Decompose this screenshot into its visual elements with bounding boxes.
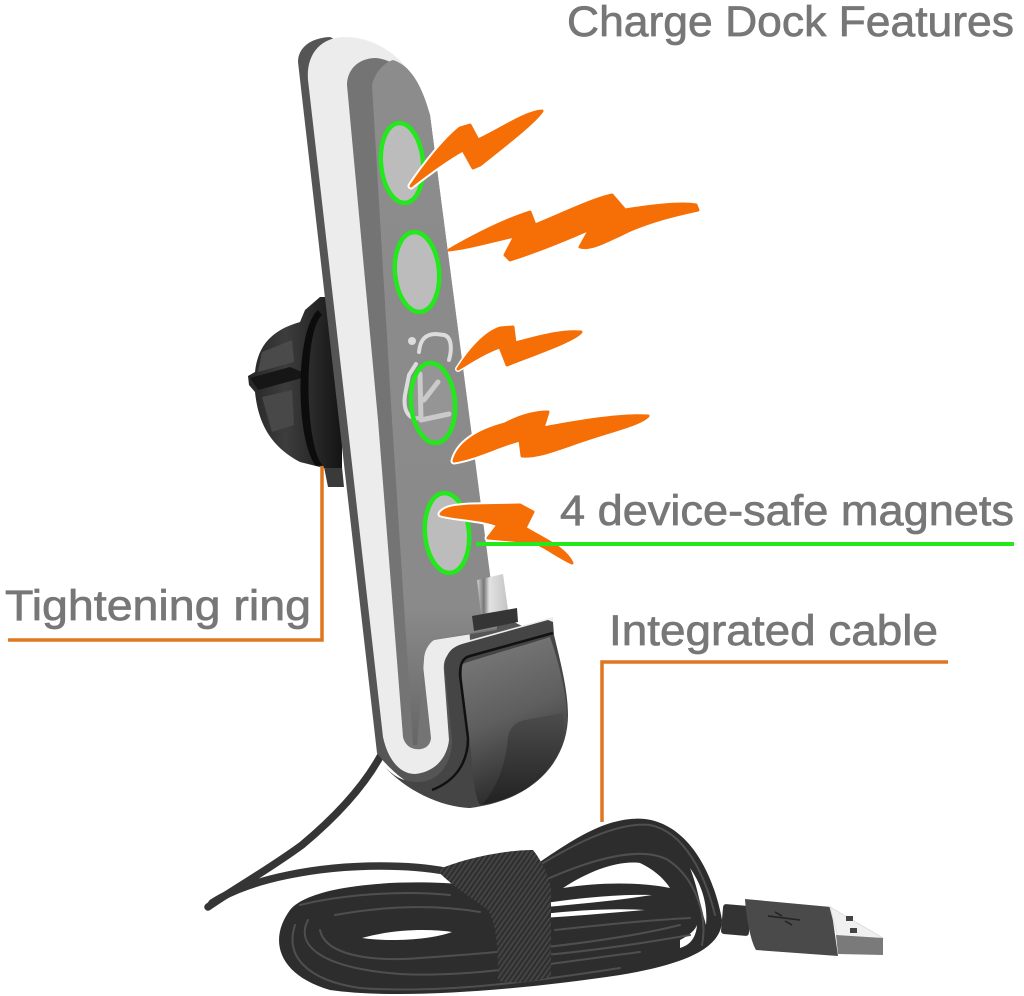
tightening ring leader line (8, 466, 322, 640)
panel side band (347, 58, 497, 749)
coil openings (362, 862, 706, 948)
bolt 3 (458, 327, 581, 369)
usb plug (721, 899, 883, 956)
magnets label: 4 device-safe magnets (560, 487, 1014, 535)
bolt 2 (449, 195, 698, 260)
magnet 3 (408, 361, 458, 445)
coil strand highlights (293, 825, 715, 990)
integrated cable loose strand (208, 755, 490, 907)
bolt 4 (454, 412, 648, 461)
charge dock body (298, 37, 568, 808)
integrated cable leader line (602, 662, 948, 822)
callout: tightening ring (5, 466, 322, 640)
bolt 5 (441, 505, 572, 563)
magnets leader line (476, 542, 1014, 546)
magnet circles (378, 121, 472, 575)
magnet 1 (378, 121, 426, 205)
rider logo on panel (405, 334, 451, 420)
cable strap (437, 850, 551, 982)
panel face (372, 60, 497, 745)
bottom cup (383, 620, 568, 808)
tightening ring label: Tightening ring (5, 582, 311, 630)
cable coil (279, 819, 722, 994)
dock back shell (298, 37, 550, 808)
coil silhouette (279, 819, 722, 994)
usb-c connector (472, 574, 518, 631)
integrated cable label: Integrated cable (609, 607, 938, 655)
bolt 1 (411, 111, 542, 186)
callout: integrated cable (602, 607, 948, 822)
magnet 4 (422, 491, 472, 575)
icon: tightening ring knob (248, 297, 344, 487)
white rim (308, 37, 553, 774)
magnet 2 (392, 230, 442, 314)
lightning bolts (411, 111, 698, 563)
